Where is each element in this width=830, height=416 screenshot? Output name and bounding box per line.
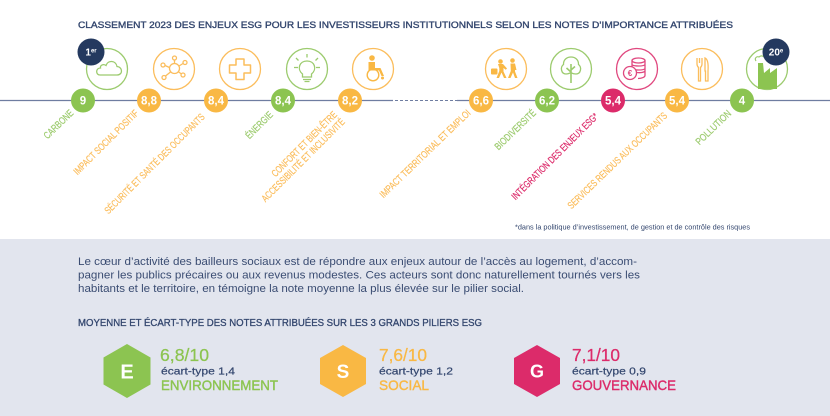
icon: tree (biodiversité) <box>550 48 592 90</box>
score: énergie 8,4: 8,4 <box>275 96 292 108</box>
score: impact social 8,8: 8,8 <box>141 96 158 108</box>
score: intégration 5,4 <box>601 88 625 112</box>
hexagon E <box>104 344 150 398</box>
badge: 1er rank: er <box>91 48 97 54</box>
label: services rendus: SERVICES RENDUS AUX OCCUPANTS <box>566 110 670 212</box>
icon: euro coins (intégration ESG) <box>616 48 658 90</box>
score: carbone 9 <box>71 88 95 112</box>
deviation E: écart-type 1,4 <box>161 366 235 378</box>
hexagon G: G <box>530 362 544 382</box>
score: pollution 4: 4 <box>739 96 746 108</box>
paragraph: habitants et le territoire, en témoigne la note moyenne la plus élevée sur le pilier social. <box>78 283 524 295</box>
icon: euro coins (intégration ESG): € <box>628 69 633 78</box>
badge: 1er rank <box>78 38 104 66</box>
pillar: environnement <box>104 344 278 398</box>
name G: GOUVERNANCE <box>572 377 676 393</box>
score: carbone 9: 9 <box>80 96 86 108</box>
icon: walking people (impact territorial) <box>486 48 526 90</box>
icon: cloud (carbone) <box>86 48 128 90</box>
label: carbone: CARBONE <box>42 108 76 142</box>
hexagon E: E <box>120 362 134 384</box>
label: énergie: ÉNERGIE <box>242 108 276 142</box>
score: confort 8,2 <box>338 88 362 112</box>
score: intégration 5,4: 5,4 <box>605 96 622 108</box>
name E: ENVIRONNEMENT <box>161 377 278 393</box>
score: pollution 4 <box>730 88 754 112</box>
badge: 1er rank: 1 <box>85 48 91 58</box>
score: sécurité 8,4: 8,4 <box>208 96 225 108</box>
name S: SOCIAL <box>379 377 429 393</box>
label: pollution: POLLUTION <box>694 108 734 148</box>
score G: 7,1/10 <box>572 345 620 365</box>
icon: fork and knife (services rendus) <box>682 48 722 90</box>
score: impact social 8,8 <box>137 88 161 112</box>
deviation G: écart-type 0,9 <box>572 366 646 378</box>
score: sécurité 8,4 <box>204 88 228 112</box>
panel: summary <box>0 239 830 416</box>
label: impact social positif: IMPACT SOCIAL POSITIF <box>72 108 141 178</box>
badge: 20e rank: 20 <box>769 48 780 58</box>
paragraph: pagner les publics précaires ou aux revenus modestes. Ces acteurs sont donc naturellement tournés vers les <box>78 270 641 282</box>
icon: factory (pollution) <box>746 48 788 90</box>
subheading: MOYENNE ET ÉCART-TYPE DES NOTES ATTRIBUÉES SUR LES 3 GRANDS PILIERS ESG <box>78 316 482 329</box>
score: services 5,4 <box>665 88 689 112</box>
hexagon S: S <box>337 362 349 383</box>
label: sécurité et santé: SÉCURITÉ ET SANTÉ DES OCCUPANTS <box>101 110 208 217</box>
label: intégration des enjeux: INTÉGRATION DES ENJEUX ESG* <box>508 110 601 203</box>
score: impact territorial 6,6: 6,6 <box>473 96 489 108</box>
label: accessibilité et inclusivité: ACCESSIBILITÉ ET INCLUSIVITÉ <box>258 115 348 205</box>
pillar: social <box>320 345 453 397</box>
score: énergie 8,4 <box>271 88 295 112</box>
icon: wheelchair (confort et accessibilité) <box>352 48 394 90</box>
score E: 6,8/10 <box>160 345 209 365</box>
deviation S: écart-type 1,2 <box>379 366 453 378</box>
score: biodiversité 6,2: 6,2 <box>539 96 555 108</box>
score: impact territorial 6,6 <box>469 88 493 112</box>
pillar: gouvernance <box>514 345 676 397</box>
score: confort 8,2: 8,2 <box>342 96 358 108</box>
title: CLASSEMENT 2023 DES ENJEUX ESG POUR LES INVESTISSEURS INSTITUTIONNELS SELON LES NOTES D’IMPORTANCE ATTRIBUÉES <box>78 20 733 31</box>
paragraph <box>78 256 641 295</box>
icon: network (impact social) <box>154 48 194 90</box>
label: biodiversité: BIODIVERSITÉ <box>492 106 539 153</box>
score S: 7,6/10 <box>379 345 427 365</box>
badge: 20e rank <box>762 38 790 66</box>
paragraph: Le cœur d’activité des bailleurs sociaux est de répondre aux enjeux autour de l’accès au logement, d’accom- <box>78 256 637 268</box>
score: biodiversité 6,2 <box>535 88 559 112</box>
timeline axis <box>0 100 830 102</box>
icon: medical cross (sécurité et santé) <box>220 48 260 90</box>
badge: 20e rank: e <box>780 48 784 54</box>
score: services 5,4: 5,4 <box>669 96 686 108</box>
footnote: *dans la politique d’investissement, de gestion et de contrôle des risques <box>515 222 750 232</box>
label: confort et bien-être: CONFORT ET BIEN-ÊTRE <box>268 108 340 180</box>
hexagon G <box>514 345 560 397</box>
label: impact territorial et emploi: IMPACT TERRITORIAL ET EMPLOI <box>378 108 473 201</box>
icon: light bulb (énergie) <box>286 48 328 90</box>
